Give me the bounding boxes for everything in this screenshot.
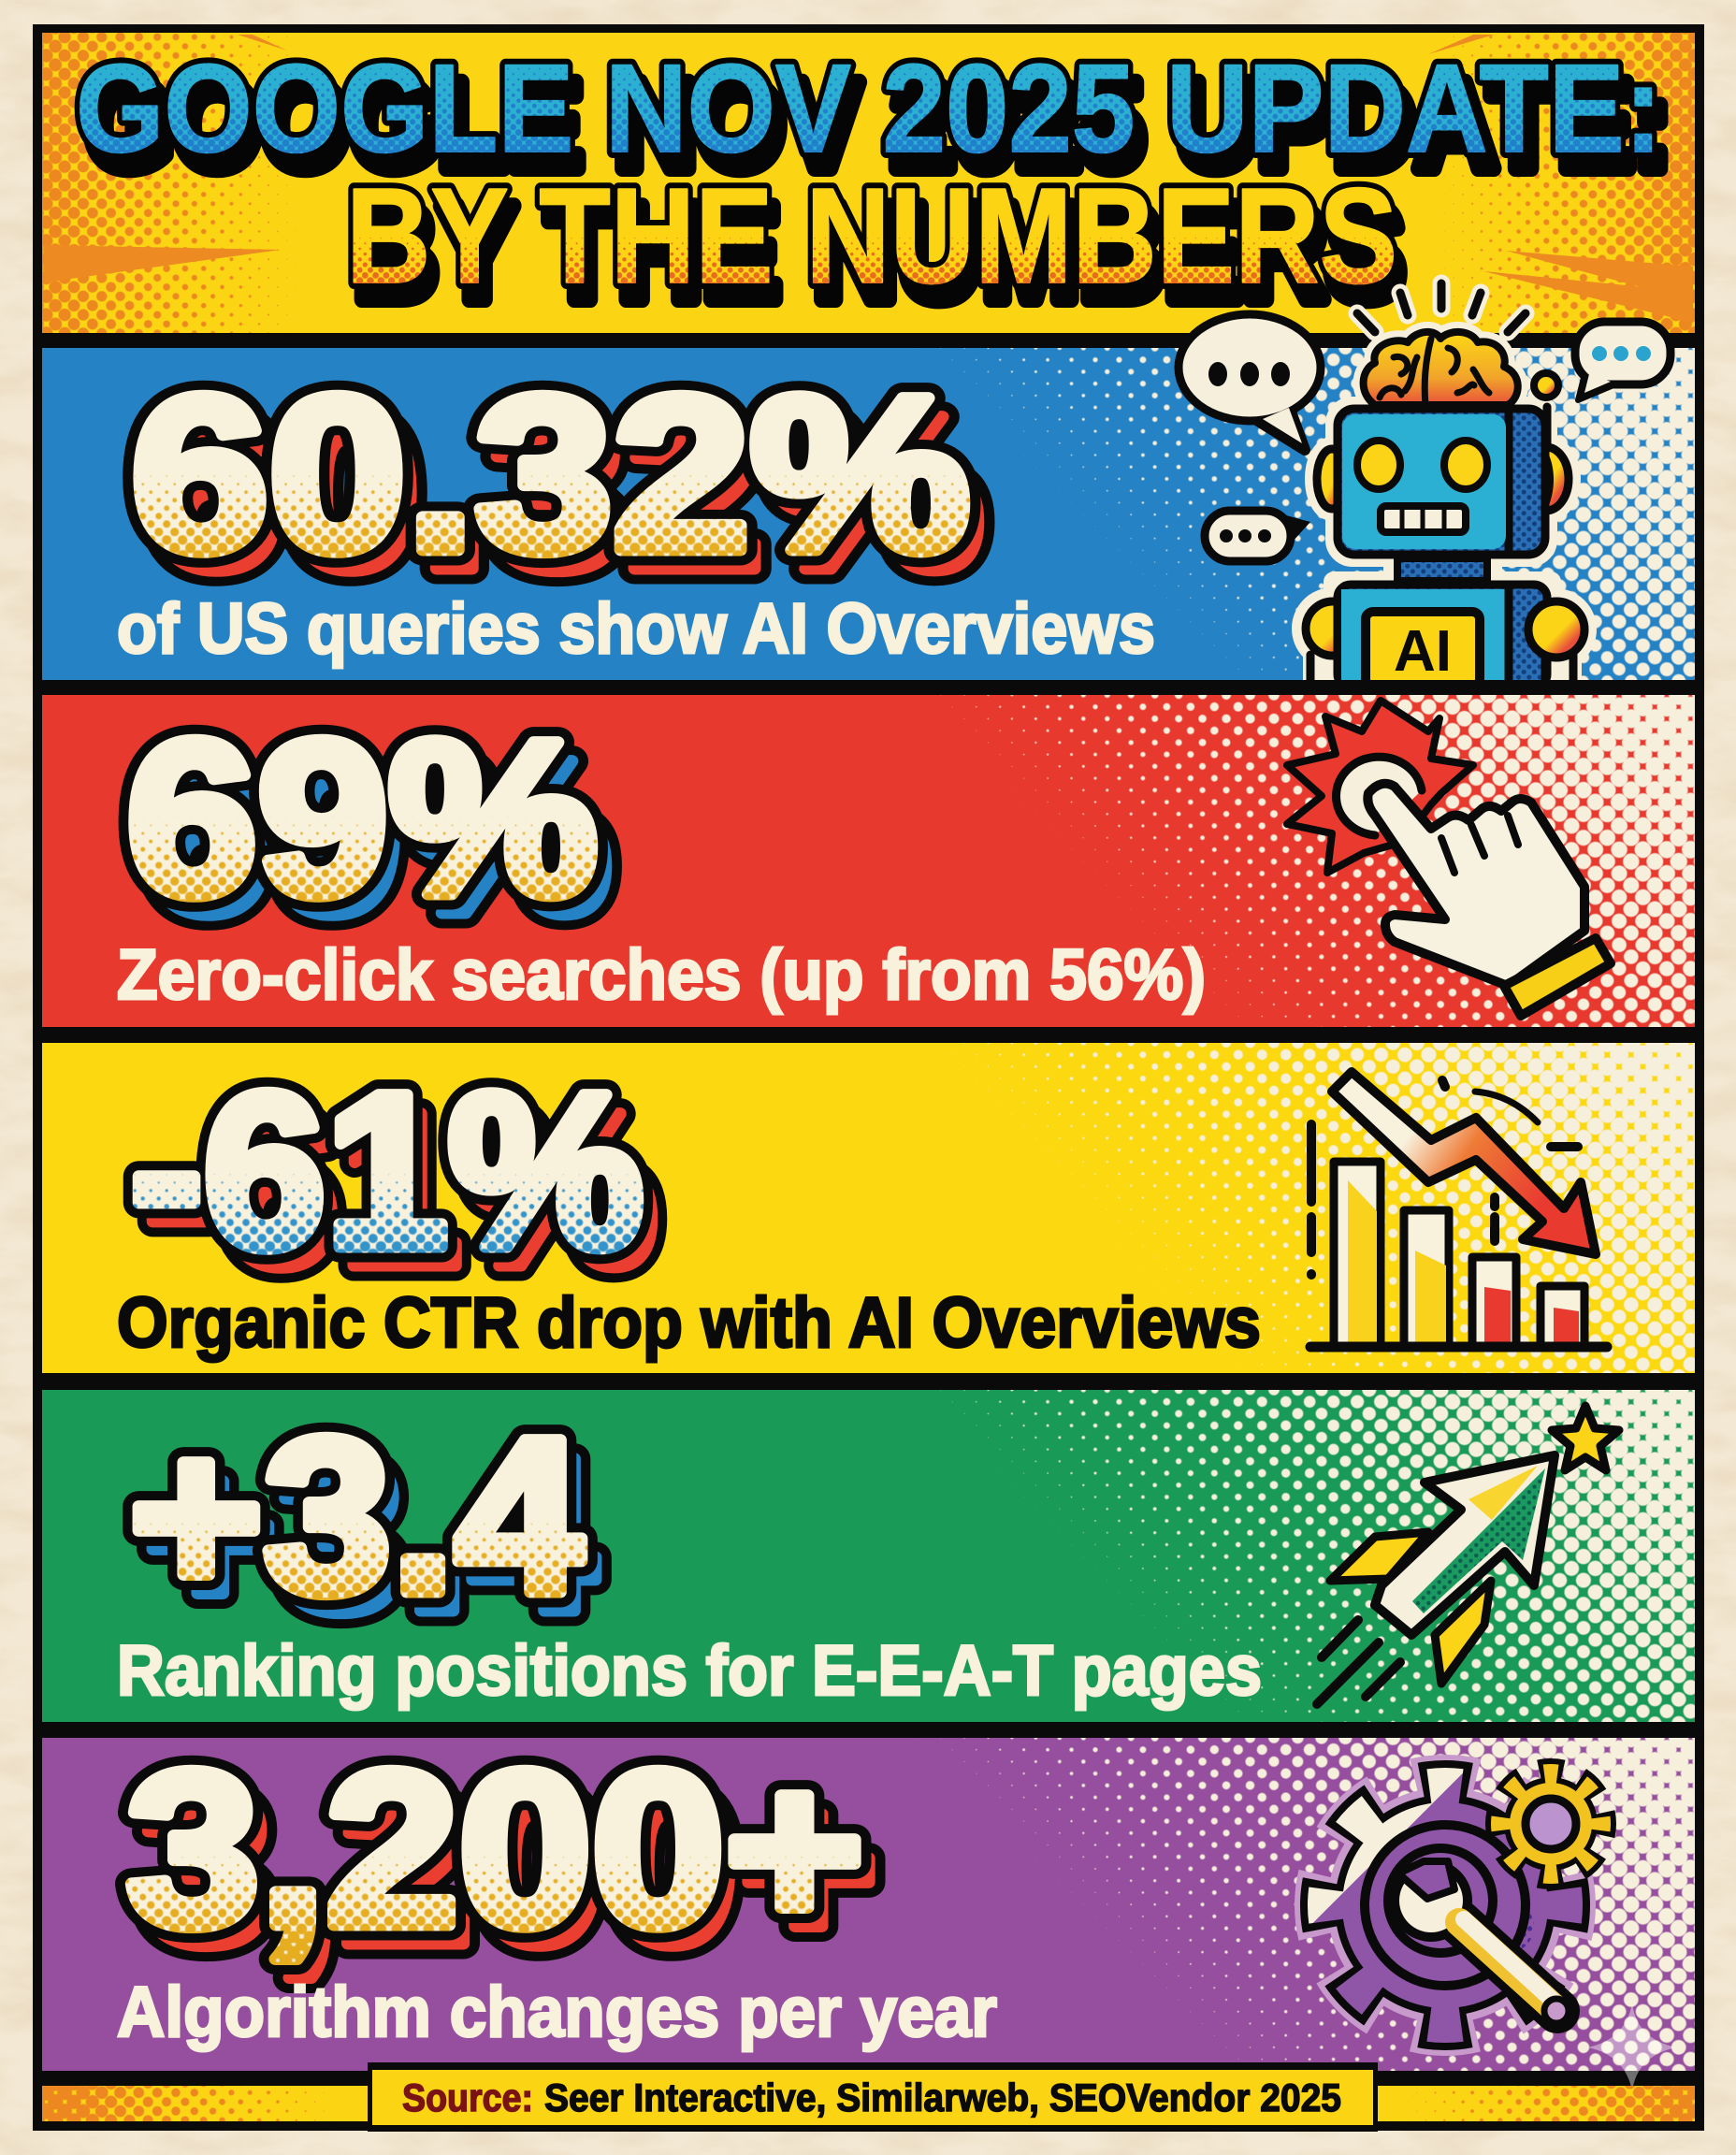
label: E-E-A-T: Ranking positions for E-E-A-T pages xyxy=(117,1631,1262,1711)
stat: 69%: 69% xyxy=(140,714,612,961)
bottom strip xyxy=(42,2086,1695,2121)
stat: 60.32%: 60.32% xyxy=(131,351,970,598)
robot brain xyxy=(1364,332,1518,405)
icon: thinking robot xyxy=(1179,283,1671,687)
speech bubble large xyxy=(1179,314,1321,450)
watermark sparkle xyxy=(1588,2003,1676,2091)
icon: clicking hand xyxy=(1287,701,1611,1016)
robot ears and antenna xyxy=(1317,373,1569,511)
robot halo xyxy=(1302,332,1586,680)
stat: 69%: 69% xyxy=(140,714,612,961)
stat: +3.4: +3.4 xyxy=(143,1411,597,1658)
rays xyxy=(1357,283,1526,332)
stat: -61%: -61% xyxy=(130,1048,644,1294)
speech bubble small xyxy=(1205,511,1310,561)
label: AI Overviews: of US queries show AI Overviews xyxy=(117,589,1155,669)
panel: E-E-A-T xyxy=(42,1390,1695,1722)
stat: 3,200+: 3,200+ xyxy=(140,1744,878,1991)
icon: rocket arrow xyxy=(1317,1455,1555,1704)
stat: +3.4: +3.4 xyxy=(143,1411,597,1658)
label: zero-click: Zero-click searches (up from 56%) xyxy=(117,935,1206,1015)
title line 2: BY THE NUMBERS xyxy=(346,160,1397,311)
panel separators over robot xyxy=(42,680,1695,695)
panel: AI Overviews xyxy=(42,348,1695,680)
icon: star xyxy=(1552,1406,1619,1470)
robot right shoulder xyxy=(1528,601,1584,680)
panel: header xyxy=(42,33,1695,333)
panel: organic CTR xyxy=(42,1043,1695,1373)
stat: 3,200+: 3,200+ xyxy=(126,1726,864,1973)
icon: falling bar chart xyxy=(1310,1072,1607,1347)
source box xyxy=(368,2062,1378,2132)
speech bubble right xyxy=(1575,322,1671,400)
panel: algorithm changes xyxy=(42,1726,1695,2091)
stat: -61%: -61% xyxy=(144,1066,658,1313)
stat: +3.4: +3.4 xyxy=(129,1393,583,1640)
AI badge text: AI xyxy=(1394,619,1452,684)
stat: 69%: 69% xyxy=(126,695,598,942)
robot head xyxy=(1338,409,1545,555)
robot left shoulder xyxy=(1306,601,1360,680)
label: algorithm changes: Algorithm changes per year xyxy=(117,1973,997,2052)
source label: Source: xyxy=(402,2075,533,2119)
source text: Seer Interactive, Similarweb, SEOVendor 2025 xyxy=(544,2075,1341,2119)
stat: 60.32%: 60.32% xyxy=(131,351,970,598)
stat: -61%: -61% xyxy=(130,1048,644,1294)
robot neck xyxy=(1397,558,1487,581)
stat: +3.4: +3.4 xyxy=(129,1393,583,1640)
label: organic CTR: Organic CTR drop with AI Overviews xyxy=(117,1283,1261,1363)
title line 2: BY THE NUMBERS xyxy=(346,160,1397,311)
robot body xyxy=(1338,585,1547,687)
stat: -61%: -61% xyxy=(144,1066,658,1313)
stat: 60.32%: 60.32% xyxy=(145,369,984,616)
icon: gears and wrench xyxy=(1324,1772,1602,2027)
stat: 60.32%: 60.32% xyxy=(145,369,984,616)
stat: 3,200+: 3,200+ xyxy=(140,1744,878,1991)
panel: zero-click xyxy=(42,695,1695,1027)
title line 2: BY THE NUMBERS xyxy=(354,177,1405,328)
stat: 69%: 69% xyxy=(126,695,598,942)
stat: 3,200+: 3,200+ xyxy=(126,1726,864,1973)
